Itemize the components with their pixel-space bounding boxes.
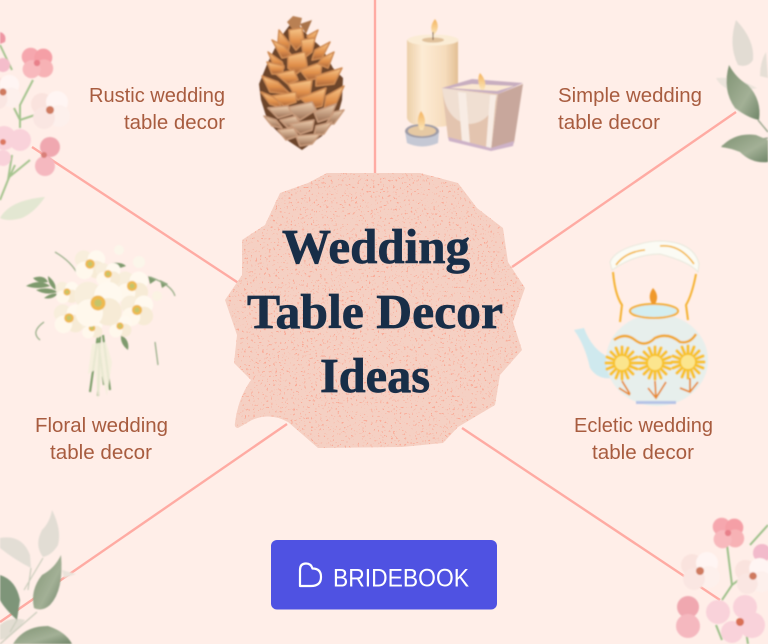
blob shape: [220, 168, 530, 453]
icon: teapot: [574, 241, 708, 406]
icon: candles: [405, 19, 523, 151]
icon: pine cone: [259, 16, 344, 150]
icon: bouquet: [26, 245, 175, 400]
stems and ribbon: [90, 335, 110, 396]
base mark: [636, 401, 676, 404]
leaves: [26, 263, 168, 350]
text: ecletic label: table decor: [592, 441, 694, 464]
knob: [650, 288, 657, 304]
text: ecletic label: [574, 414, 713, 464]
sunflowers: [606, 347, 638, 379]
big candle: [407, 19, 458, 127]
handle grip: [610, 241, 699, 272]
text: simple label: Simple wedding: [558, 84, 702, 107]
text: floral label: table decor: [50, 441, 152, 464]
body: [606, 314, 708, 406]
text: floral label: Floral wedding: [35, 414, 168, 437]
text: rustic label: Rustic wedding: [89, 84, 225, 107]
glass candle: [442, 73, 523, 151]
text: brand: BRIDEBOOK: [333, 564, 469, 592]
title: Ideas: [320, 348, 430, 403]
icon: bottom right flowers: [676, 518, 768, 644]
text: rustic label: table decor: [124, 111, 225, 134]
text: simple label: table decor: [558, 111, 660, 134]
title: [247, 219, 503, 403]
icon: bottom left leaves: [0, 510, 76, 644]
icon: heart logo: [300, 564, 321, 586]
text: simple label: [558, 84, 702, 134]
tealight: [405, 111, 439, 146]
icon: top right leaves: [716, 20, 768, 162]
text: floral label: [35, 414, 168, 464]
central blob with title: [220, 168, 530, 453]
spout: [574, 328, 612, 378]
icon: top left flowers: [0, 32, 70, 220]
lid: [630, 304, 678, 318]
text: ecletic label: Ecletic wedding: [574, 414, 713, 437]
flowers: [75, 250, 105, 279]
handle wires: [613, 272, 696, 322]
title: Wedding: [282, 219, 470, 274]
title: Table Decor: [247, 284, 503, 339]
text: rustic label: [89, 84, 225, 134]
logo button: [271, 540, 497, 610]
